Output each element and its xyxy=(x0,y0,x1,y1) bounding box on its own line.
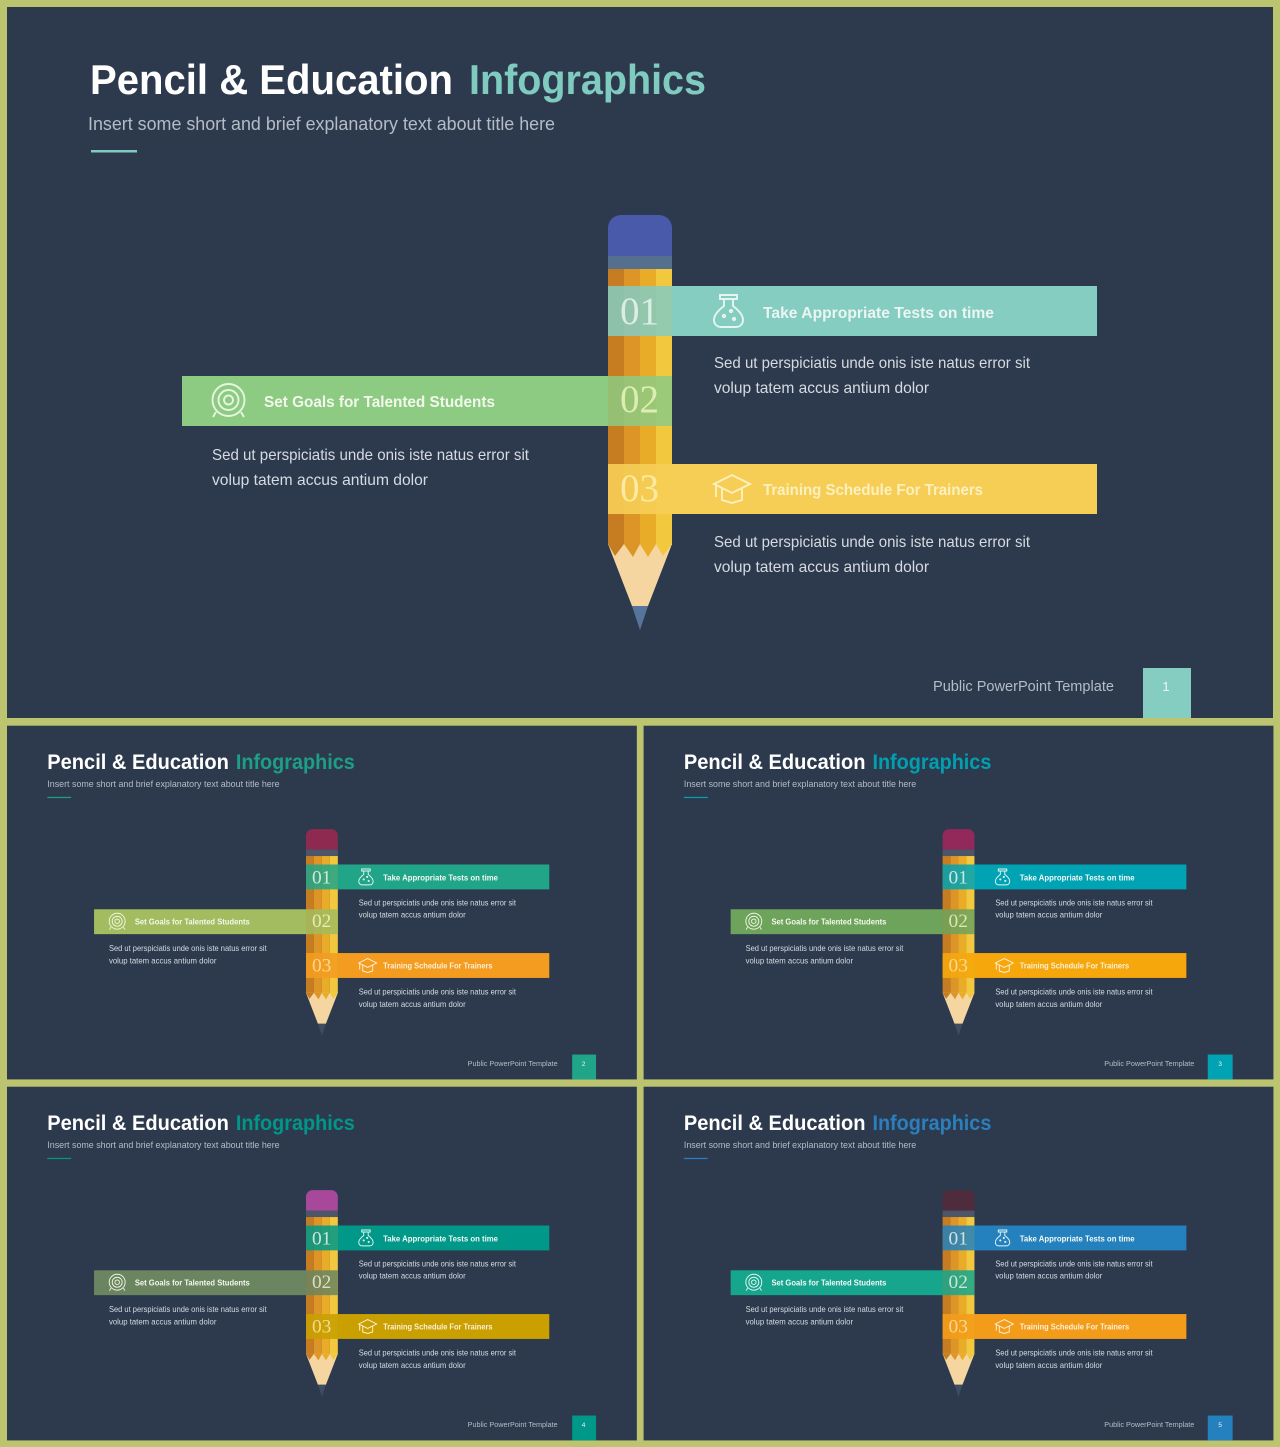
band 03: 03 xyxy=(312,955,331,976)
text block 03 xyxy=(359,987,517,1009)
band 03: 03 xyxy=(949,1316,968,1337)
text block 02: Sed ut perspiciatis unde onis iste natus error sit xyxy=(212,447,530,464)
icon: graduation cap xyxy=(359,1320,377,1333)
title xyxy=(684,751,991,774)
text block 03: volup tatem accus antium dolor xyxy=(995,1000,1103,1009)
band 02: 02 xyxy=(949,1272,968,1293)
page number xyxy=(1208,1055,1233,1079)
band 01: 01 xyxy=(949,1228,968,1249)
text block 03: Sed ut perspiciatis unde onis iste natus error sit xyxy=(359,1348,517,1357)
subtitle: Insert some short and brief explanatory text about title here xyxy=(88,114,555,134)
pencil xyxy=(943,1190,974,1397)
subtitle: Insert some short and brief explanatory text about title here xyxy=(47,1140,280,1150)
icon: flask xyxy=(359,869,373,885)
title: Infographics xyxy=(872,751,991,774)
page number xyxy=(572,1055,596,1079)
text block 03: volup tatem accus antium dolor xyxy=(995,1361,1103,1370)
icon: graduation cap xyxy=(714,475,750,503)
text block 03: Sed ut perspiciatis unde onis iste natus error sit xyxy=(995,1348,1153,1357)
text block 01: volup tatem accus antium dolor xyxy=(995,1272,1103,1281)
band 02: Set Goals for Talented Students xyxy=(264,394,495,411)
text block 03 xyxy=(359,1348,517,1370)
text block 02 xyxy=(212,447,530,489)
text block 02: Sed ut perspiciatis unde onis iste natus error sit xyxy=(109,944,267,953)
icon: target xyxy=(212,384,244,417)
band 01: 01 xyxy=(312,1228,331,1249)
band 02 xyxy=(182,376,672,426)
text block 01 xyxy=(995,898,1153,920)
slide 5 xyxy=(644,1087,1273,1440)
band 01 xyxy=(943,1226,1186,1250)
band 01 xyxy=(608,286,1097,336)
text block 03 xyxy=(995,1348,1153,1370)
icon: graduation cap xyxy=(995,959,1013,972)
band 03: Training Schedule For Trainers xyxy=(383,1322,493,1331)
band 02: Set Goals for Talented Students xyxy=(771,1279,887,1288)
text block 01: Sed ut perspiciatis unde onis iste natus error sit xyxy=(359,1259,517,1268)
text block 01 xyxy=(995,1259,1153,1281)
title: Infographics xyxy=(236,751,355,774)
slide 1 xyxy=(7,7,1273,718)
band 03: 03 xyxy=(312,1316,331,1337)
subtitle: Insert some short and brief explanatory text about title here xyxy=(684,1140,916,1150)
pencil xyxy=(608,215,672,630)
band 01 xyxy=(943,865,1186,889)
text block 01: Sed ut perspiciatis unde onis iste natus error sit xyxy=(359,898,517,907)
title: Pencil & Education xyxy=(47,751,229,774)
page number xyxy=(1208,1416,1233,1440)
text block 03: Sed ut perspiciatis unde onis iste natus error sit xyxy=(714,534,1031,551)
text block 01: volup tatem accus antium dolor xyxy=(359,911,466,920)
band 01: Take Appropriate Tests on time xyxy=(1020,1234,1135,1243)
title underline xyxy=(47,1158,71,1159)
title: Pencil & Education xyxy=(90,56,453,103)
text block 02: volup tatem accus antium dolor xyxy=(212,472,429,489)
text block 01: Sed ut perspiciatis unde onis iste natus error sit xyxy=(714,355,1031,372)
band 01: Take Appropriate Tests on time xyxy=(1020,873,1135,882)
pencil xyxy=(306,1190,338,1397)
text block 02 xyxy=(746,1305,904,1327)
text block 02 xyxy=(109,944,267,966)
text block 02: Sed ut perspiciatis unde onis iste natus error sit xyxy=(746,944,904,953)
subtitle: Insert some short and brief explanatory text about title here xyxy=(47,779,280,789)
band 03: Training Schedule For Trainers xyxy=(1020,961,1130,970)
band 03: 03 xyxy=(620,467,659,510)
text block 03: volup tatem accus antium dolor xyxy=(714,559,930,576)
page number: 4 xyxy=(582,1422,586,1429)
band 02: Set Goals for Talented Students xyxy=(135,1279,250,1288)
band 02 xyxy=(731,909,974,934)
text block 02: Sed ut perspiciatis unde onis iste natus error sit xyxy=(109,1305,267,1314)
text block 02 xyxy=(746,944,904,966)
icon: flask xyxy=(995,869,1010,885)
icon: graduation cap xyxy=(359,959,377,972)
title underline xyxy=(91,150,137,152)
icon: target xyxy=(746,913,762,930)
icon: flask xyxy=(359,1230,373,1246)
title: Pencil & Education xyxy=(47,1112,229,1135)
band 02: Set Goals for Talented Students xyxy=(771,918,887,927)
text block 02: volup tatem accus antium dolor xyxy=(746,1318,853,1327)
text block 02: volup tatem accus antium dolor xyxy=(109,957,217,966)
band 02: 02 xyxy=(312,911,331,932)
band 02: Set Goals for Talented Students xyxy=(135,918,250,927)
band 01: Take Appropriate Tests on time xyxy=(763,305,994,322)
page number xyxy=(1143,668,1191,718)
text block 03: volup tatem accus antium dolor xyxy=(359,1361,466,1370)
band 02: 02 xyxy=(949,911,968,932)
band 03: Training Schedule For Trainers xyxy=(763,482,983,499)
pencil xyxy=(943,829,974,1036)
title: Infographics xyxy=(872,1112,991,1135)
band 03: Training Schedule For Trainers xyxy=(1020,1322,1130,1331)
slide 2 xyxy=(7,726,637,1079)
footer label: Public PowerPoint Template xyxy=(1104,1059,1194,1068)
text block 02: volup tatem accus antium dolor xyxy=(109,1318,217,1327)
band 01: Take Appropriate Tests on time xyxy=(383,873,499,882)
text block 01: volup tatem accus antium dolor xyxy=(995,911,1103,920)
slide 3 xyxy=(644,726,1273,1079)
band 01: 01 xyxy=(949,867,968,888)
band 03 xyxy=(943,1314,1186,1339)
page number: 1 xyxy=(1162,679,1170,694)
band 01 xyxy=(306,1226,549,1250)
footer label: Public PowerPoint Template xyxy=(933,679,1114,695)
icon: flask xyxy=(714,295,743,327)
title: Infographics xyxy=(236,1112,355,1135)
band 03 xyxy=(608,464,1097,514)
band 02: 02 xyxy=(312,1272,331,1293)
footer label: Public PowerPoint Template xyxy=(1104,1420,1194,1429)
text block 01: volup tatem accus antium dolor xyxy=(714,380,930,397)
band 02 xyxy=(731,1270,974,1295)
text block 02: Sed ut perspiciatis unde onis iste natus error sit xyxy=(746,1305,904,1314)
title: Pencil & Education xyxy=(684,751,865,774)
title underline xyxy=(684,797,708,798)
text block 03: volup tatem accus antium dolor xyxy=(359,1000,466,1009)
band 01: 01 xyxy=(620,290,659,333)
band 02 xyxy=(94,1270,338,1295)
icon: target xyxy=(109,913,125,930)
text block 01: Sed ut perspiciatis unde onis iste natus error sit xyxy=(995,898,1153,907)
text block 01: Sed ut perspiciatis unde onis iste natus error sit xyxy=(995,1259,1153,1268)
title xyxy=(47,751,355,774)
title xyxy=(684,1112,991,1135)
band 03: Training Schedule For Trainers xyxy=(383,961,493,970)
title: Infographics xyxy=(469,56,706,103)
text block 02: volup tatem accus antium dolor xyxy=(746,957,853,966)
subtitle: Insert some short and brief explanatory text about title here xyxy=(684,779,916,789)
band 03 xyxy=(306,1314,549,1339)
title underline xyxy=(684,1158,708,1159)
icon: target xyxy=(746,1274,762,1291)
title: Pencil & Education xyxy=(684,1112,865,1135)
icon: graduation cap xyxy=(995,1320,1013,1333)
footer label: Public PowerPoint Template xyxy=(468,1059,558,1068)
icon: flask xyxy=(995,1230,1010,1246)
band 02: 02 xyxy=(620,378,659,421)
page number: 2 xyxy=(582,1061,586,1068)
text block 01: volup tatem accus antium dolor xyxy=(359,1272,466,1281)
text block 03: Sed ut perspiciatis unde onis iste natus error sit xyxy=(359,987,517,996)
icon: target xyxy=(109,1274,125,1291)
page number: 5 xyxy=(1218,1422,1222,1429)
band 03 xyxy=(306,953,549,978)
text block 01 xyxy=(714,355,1031,397)
text block 03 xyxy=(714,534,1031,576)
title underline xyxy=(47,797,71,798)
text block 03: Sed ut perspiciatis unde onis iste natus error sit xyxy=(995,987,1153,996)
page number xyxy=(572,1416,596,1440)
text block 02 xyxy=(109,1305,267,1327)
band 02 xyxy=(94,909,338,934)
title xyxy=(47,1112,355,1135)
text block 01 xyxy=(359,1259,517,1281)
slide 4 xyxy=(7,1087,637,1440)
band 01 xyxy=(306,865,549,889)
text block 03 xyxy=(995,987,1153,1009)
footer label: Public PowerPoint Template xyxy=(468,1420,558,1429)
band 01: Take Appropriate Tests on time xyxy=(383,1234,499,1243)
band 01: 01 xyxy=(312,867,331,888)
pencil xyxy=(306,829,338,1036)
band 03 xyxy=(943,953,1186,978)
band 03: 03 xyxy=(949,955,968,976)
page number: 3 xyxy=(1218,1061,1222,1068)
title xyxy=(90,56,706,103)
text block 01 xyxy=(359,898,517,920)
